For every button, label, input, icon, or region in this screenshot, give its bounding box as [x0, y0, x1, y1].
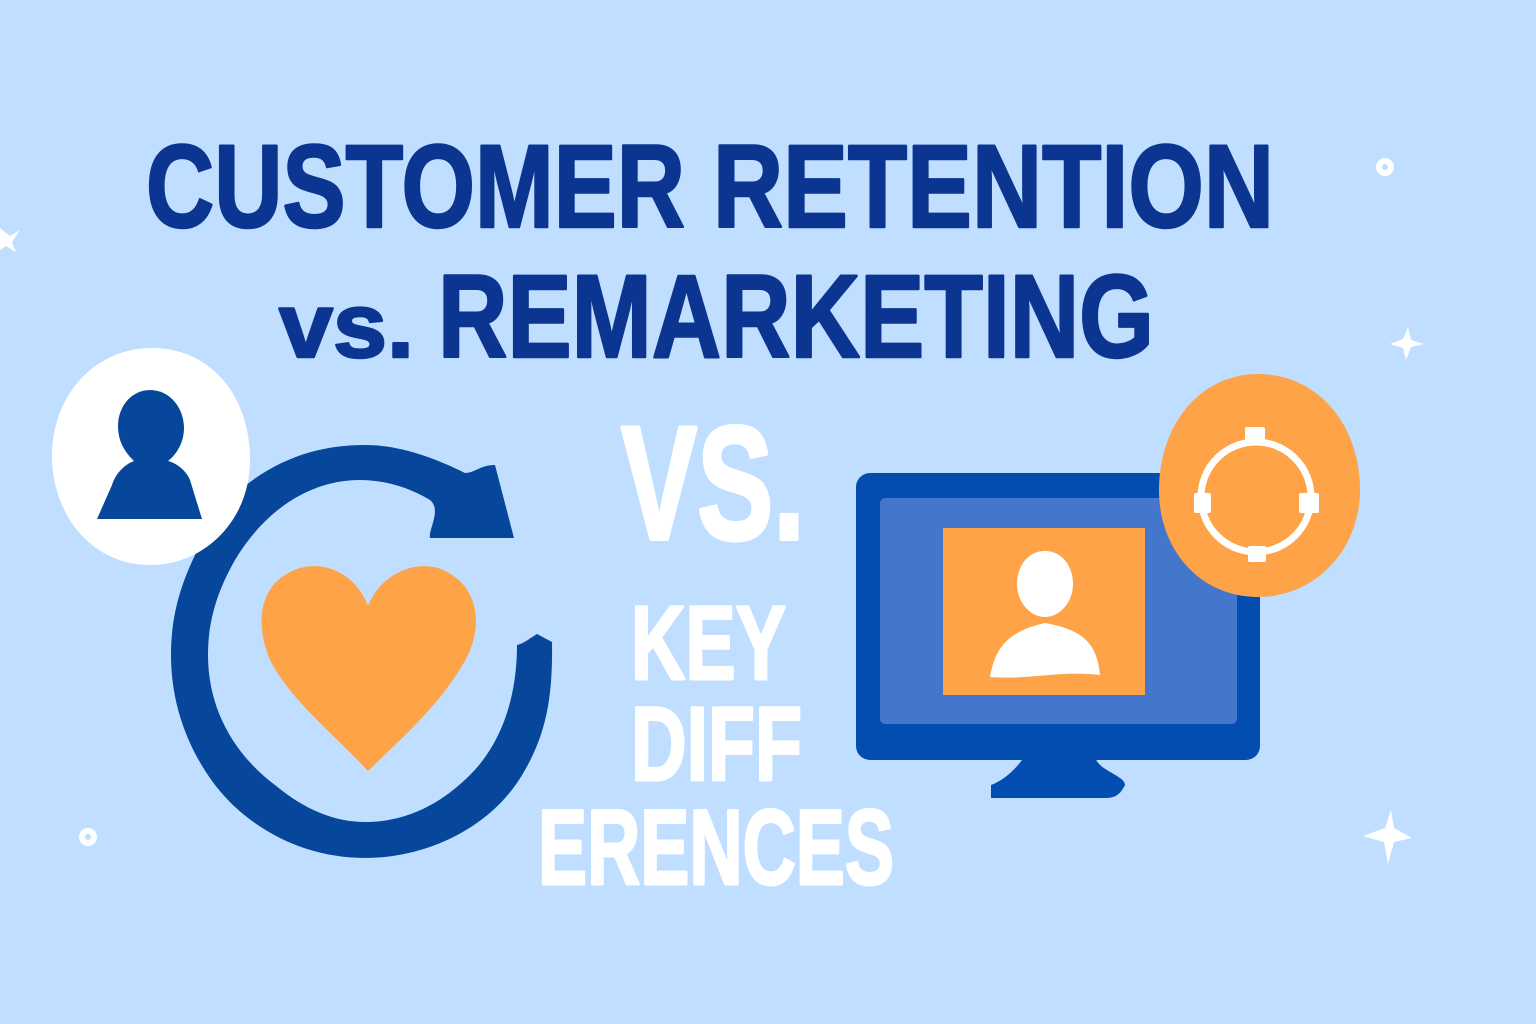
sparkle top right ring: [1376, 158, 1394, 176]
title: REMARKETING: [438, 251, 1154, 383]
icon: target ring: [1194, 427, 1319, 562]
key differences label: [538, 585, 894, 907]
title: [146, 121, 1274, 383]
retention icon: circular arrow with heart and customer: [52, 348, 552, 858]
sparkle bottom left ring: [79, 828, 97, 846]
sparkle right: [1390, 327, 1424, 360]
key differences label: ERENCES: [538, 787, 894, 907]
monitor body: [856, 473, 1260, 760]
key differences label: KEY: [631, 585, 786, 702]
title: CUSTOMER: [146, 121, 685, 253]
icon: heart: [262, 566, 476, 771]
monitor stand: [991, 755, 1125, 798]
icon: person on screen: [990, 551, 1100, 678]
decorative sparkles: [0, 158, 1424, 864]
circular arrow: [171, 445, 552, 858]
title: vs.: [279, 275, 414, 377]
remarketing icon: monitor: [856, 374, 1360, 798]
sparkle left edge: [0, 228, 20, 252]
vs label: VS.: [621, 393, 805, 574]
sparkle bottom right: [1363, 810, 1412, 864]
title: RETENTION: [713, 121, 1274, 253]
ad panel: [943, 528, 1145, 695]
icon: person: [97, 390, 202, 519]
customer badge: [52, 348, 250, 565]
orange badge: [1159, 374, 1360, 597]
monitor screen: [880, 498, 1237, 724]
key differences label: DIFF: [631, 686, 802, 803]
